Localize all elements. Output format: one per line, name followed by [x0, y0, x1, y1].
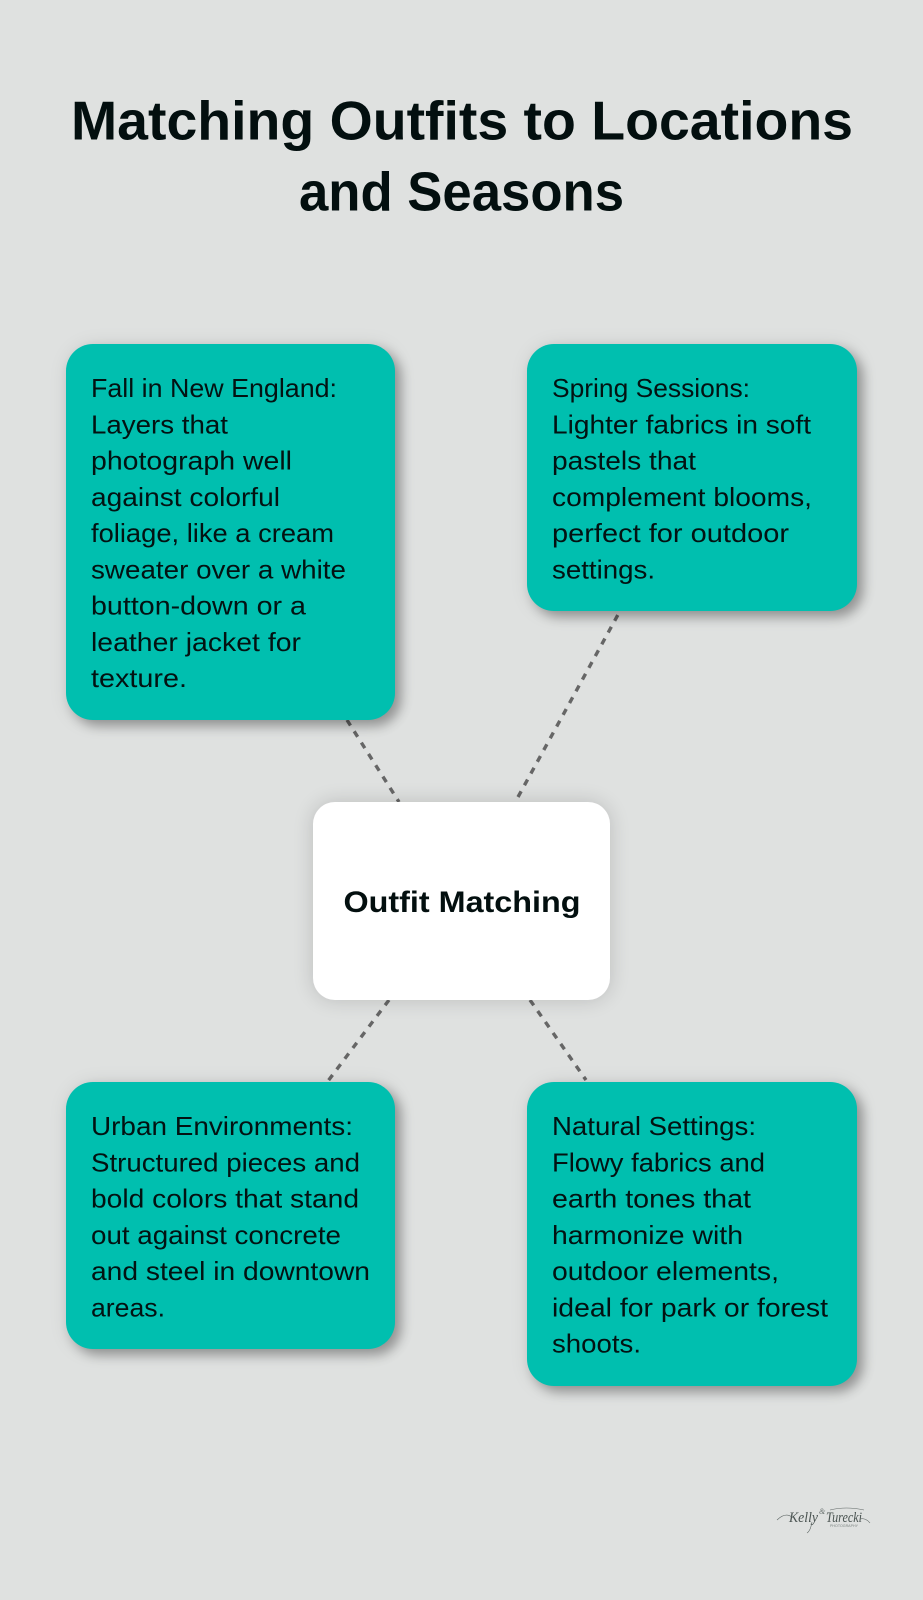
- text: Fall in New England: leather jacket for: [91, 627, 301, 657]
- text: Fall in New England: sweater over a white: [91, 554, 346, 584]
- text: Spring Sessions: Spring Sessions:: [552, 373, 750, 403]
- text: Fall in New England: button-down or a: [91, 590, 307, 620]
- panel: Urban Environments: [66, 1082, 395, 1349]
- panel: Natural Settings: [527, 1082, 857, 1386]
- panel: Fall in New England: [66, 344, 395, 720]
- panel: Spring Sessions: [527, 344, 857, 611]
- text: Fall in New England: [91, 373, 346, 693]
- text: Urban Environments: out against concrete: [91, 1220, 341, 1250]
- text: Urban Environments: Urban Environments:: [91, 1111, 353, 1141]
- text: Spring Sessions: perfect for outdoor: [552, 518, 789, 548]
- text: Natural Settings: earth tones that: [552, 1184, 752, 1214]
- text: Spring Sessions: pastels that: [552, 446, 697, 476]
- text: Urban Environments: bold colors that stand: [91, 1184, 359, 1214]
- text: Natural Settings: Flowy fabrics and: [552, 1147, 765, 1177]
- logo: Kelly & Turecki signature: [776, 1507, 870, 1534]
- text: Natural Settings: outdoor elements,: [552, 1256, 779, 1286]
- title: Matching Outfits to Locations: [71, 90, 853, 152]
- text: Fall in New England: texture.: [91, 663, 187, 693]
- title: and Seasons: [299, 162, 624, 222]
- text: Fall in New England: photograph well: [91, 446, 292, 476]
- text: Urban Environments: areas.: [91, 1292, 165, 1322]
- panel: center node Outfit Matching: [313, 802, 610, 1000]
- logo: Kelly & Turecki signature: &: [819, 1507, 826, 1516]
- text: Urban Environments: and steel in downtown: [91, 1256, 370, 1286]
- text: Outfit Matching: Outfit Matching: [344, 886, 580, 919]
- text: Natural Settings: ideal for park or forest: [552, 1292, 829, 1322]
- text: Fall in New England: foliage, like a cream: [91, 518, 334, 548]
- text: Spring Sessions: [552, 373, 812, 584]
- text: Natural Settings: [552, 1111, 829, 1358]
- text: Fall in New England: against colorful: [91, 482, 280, 512]
- logo: Kelly & Turecki signature: Kelly: [788, 1510, 818, 1526]
- text: Spring Sessions: Lighter fabrics in soft: [552, 409, 812, 439]
- logo: Kelly & Turecki signature: PHOTOGRAPHY: [830, 1524, 859, 1528]
- text: Natural Settings: harmonize with: [552, 1220, 743, 1250]
- text: Urban Environments: Structured pieces and: [91, 1147, 360, 1177]
- text: Urban Environments: [91, 1111, 370, 1322]
- text: Spring Sessions: settings.: [552, 554, 655, 584]
- text: Fall in New England: Fall in New England:: [91, 373, 337, 403]
- text: Spring Sessions: complement blooms,: [552, 482, 812, 512]
- text: Natural Settings: Natural Settings:: [552, 1111, 756, 1141]
- text: Fall in New England: Layers that: [91, 409, 229, 439]
- logo: Kelly & Turecki signature: Turecki: [826, 1510, 862, 1526]
- text: Natural Settings: shoots.: [552, 1328, 641, 1358]
- title: [71, 90, 853, 222]
